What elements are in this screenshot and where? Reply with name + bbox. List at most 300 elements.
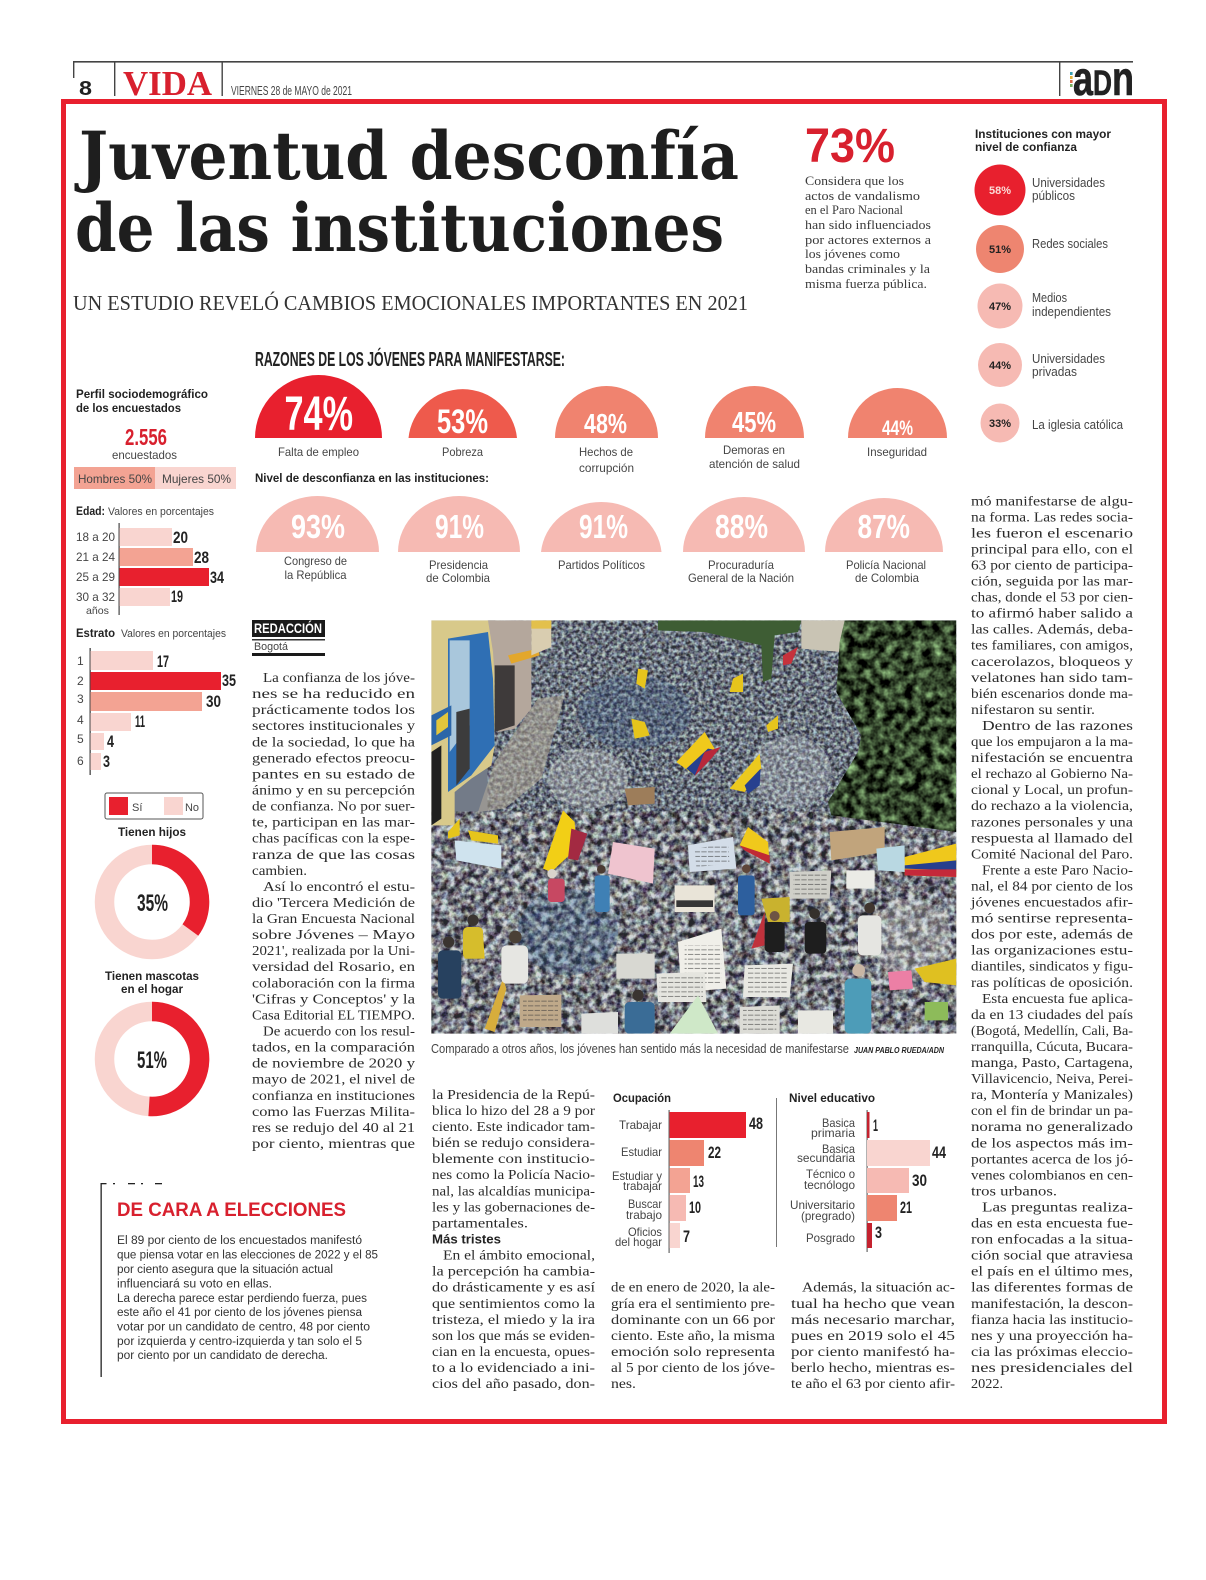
article text: column 1: res se redujo del 40 al 21 <box>252 1121 415 1136</box>
donut chart: tienen hijos <box>104 825 200 950</box>
circle: universidades públicas: 58% <box>989 185 1011 197</box>
article text: column 1: Casa Editorial EL TIEMPO. <box>252 1008 415 1023</box>
bar chart: estrato: 3 <box>103 752 110 771</box>
circle: universidades públicas: públicos <box>1032 189 1075 203</box>
article text: column 1: ánimo y en su percepción <box>252 784 415 798</box>
article text: column 1: de noviembre de 2020 y <box>252 1057 415 1072</box>
bar chart: ocupación: Trabajar <box>619 1118 662 1132</box>
bar chart: nivel educativo: 44 <box>932 1143 946 1162</box>
article text: column 5: Las preguntas realiza- <box>982 1200 1133 1216</box>
article text: column 5: el país en el último mes, <box>971 1265 1133 1280</box>
article text: column 1: confianza en instituciones <box>252 1089 415 1104</box>
red page frame <box>64 102 1164 1422</box>
callout: 73%: en el Paro Nacional <box>805 202 903 217</box>
semicircle: pobreza: Pobreza <box>442 445 483 459</box>
bar chart: nivel educativo: Universitario <box>790 1198 855 1212</box>
article text: column 1: la Gran Encuesta Nacional <box>252 912 415 927</box>
semicircle: policía <box>825 498 943 585</box>
circle: iglesia católica: 33% <box>989 418 1011 430</box>
article text: column 5: ción, seguida por las mar- <box>971 574 1133 590</box>
bar chart: estrato: 1 <box>77 654 84 668</box>
gender split: Hombres 50% <box>78 472 152 486</box>
gender split: Mujeres 50% <box>162 472 231 486</box>
semicircle: hechos de corrupción: Hechos de <box>579 445 633 459</box>
article text: column 5: de los aspectos más im- <box>971 1136 1133 1151</box>
article text: column 2: tristeza, el miedo y la ira <box>432 1313 596 1328</box>
semicircle: policía: 87% <box>858 508 910 545</box>
semicircle: hechos de corrupción <box>555 386 658 475</box>
article text: column 5: ción social que atraviesa <box>971 1249 1134 1264</box>
panel: perfil sociodemográfico <box>74 387 236 1106</box>
legend sí/no: No <box>185 802 199 814</box>
subtitle: UN ESTUDIO REVELÓ CAMBIOS EMOCIONALES IMPORTANTES EN 2021 <box>73 291 748 315</box>
article text: column 5: to afirmó haber salido a <box>971 607 1134 622</box>
article text: column 5: na forma. Las redes socia- <box>971 510 1133 525</box>
date: VIERNES 28 de MAYO de 2021 <box>231 84 352 98</box>
article text: column 4: por ciento manifestó ha- <box>791 1345 955 1360</box>
semicircle: policía: Policía Nacional <box>846 558 926 572</box>
semicircle: partidos políticos <box>541 502 662 572</box>
bar chart: nivel educativo: Posgrado <box>806 1231 855 1245</box>
box text: que piensa votar en las elecciones de 2022 y el 85 <box>117 1250 378 1262</box>
photo: protest march <box>431 620 956 1034</box>
article text: column 3: dominante con un 66 por <box>611 1313 775 1328</box>
donut chart: tienen mascotas: en el hogar <box>121 982 183 996</box>
circle: medios independientes: Medios <box>1032 291 1067 305</box>
semicircle: congreso <box>256 496 379 582</box>
article text: column 5: ras políticas de oposición. <box>971 976 1133 991</box>
article text: column 1: Así lo encontró el estu- <box>263 880 415 895</box>
section name: VIDA <box>123 64 213 103</box>
circle: universidades públicas: Universidades <box>1032 176 1105 190</box>
article text: column 5: con el fin de brindar un pa- <box>971 1104 1133 1119</box>
semicircle: inseguridad: 44% <box>882 417 913 440</box>
donut chart: tienen hijos: 35% <box>137 890 168 917</box>
panel heading: Instituciones con mayor <box>975 129 1112 141</box>
article text: column 1: colaboración con la firma <box>252 976 416 991</box>
article text: column 5: mó sentirse representa- <box>971 912 1133 927</box>
article text: column 5: do rechazo a la violencia, <box>971 799 1133 814</box>
article text: column 5: portantes acerca de los jó- <box>971 1152 1133 1167</box>
callout: 73%: 73% <box>805 120 895 173</box>
article text: column 1: chas pacíficas con la espe- <box>252 832 415 847</box>
bar chart: estrato: 4 <box>77 713 84 727</box>
article text: column 5: Villavicencio, Neiva, Perei- <box>971 1072 1133 1087</box>
photo caption: Comparado a otros años, los jóvenes han sentido más la necesidad de manifestarse <box>431 1042 849 1056</box>
bar chart: nivel educativo: Basica <box>822 1142 855 1156</box>
circle: universidades públicas <box>974 164 1105 216</box>
bar chart: edad: 19 <box>171 587 183 606</box>
article text: column 5: 2022. <box>971 1377 1003 1392</box>
gender split <box>74 467 236 489</box>
article text: column 1: pantes en su estado de <box>252 767 415 782</box>
profile heading: de los encuestados <box>76 401 181 415</box>
semicircle: pobreza: 53% <box>437 403 488 441</box>
semicircle: partidos políticos: Partidos Políticos <box>558 558 645 572</box>
box heading: DE CARA A ELECCIONES <box>117 1200 346 1221</box>
people <box>463 927 483 959</box>
circle: redes sociales <box>976 225 1108 273</box>
article text: column 1 <box>252 671 416 1152</box>
bar chart: ocupación: trabajo <box>626 1208 662 1222</box>
flags <box>676 732 715 775</box>
article text: column 5: nes presidenciales del <box>971 1361 1133 1376</box>
article text: column 5: respuesta al llamado del <box>971 831 1133 846</box>
article text: column 5: mó manifestarse de algu- <box>971 494 1133 509</box>
bar chart: estrato: 11 <box>135 712 145 731</box>
article text: column 5: cacerolazos, bloqueos y <box>971 655 1133 670</box>
semicircle: inseguridad <box>848 388 947 459</box>
semicircle: presidencia <box>398 496 520 585</box>
donut chart: tienen mascotas <box>104 969 200 1106</box>
article text: column 1: tados, en la comparación <box>252 1041 415 1056</box>
bar chart: ocupación: 13 <box>693 1172 704 1191</box>
circle: redes sociales: Redes sociales <box>1032 237 1108 251</box>
bar chart: estrato: 30 <box>206 692 221 711</box>
article text: column 3 <box>611 1281 776 1392</box>
article text: column 2: cios del año pasado, don- <box>432 1377 595 1392</box>
article text: column 2: ciento. Este indicador tam- <box>432 1120 595 1135</box>
total encuestados: 2.556 <box>125 424 167 450</box>
box text: este año el 41 por ciento de los jóvenes piensa <box>117 1307 363 1319</box>
title: Juventud desconfía <box>74 117 739 195</box>
bar chart: ocupación: Estudiar y <box>612 1169 662 1183</box>
bar chart: edad: 30 a 32 <box>76 590 115 604</box>
box text: votar por un candidato de centro, 48 por ciento <box>117 1322 370 1334</box>
article text: column 5: que los empujaron a la ma- <box>971 735 1133 750</box>
article text: column 1: te, participan en las mar- <box>252 816 415 831</box>
article text: column 4: Además, la situación ac- <box>802 1281 955 1296</box>
semicircle: falta de empleo <box>255 375 382 459</box>
article text: column 5: nifestación se encuentra <box>971 751 1134 766</box>
total encuestados: encuestados <box>112 448 177 462</box>
bar chart: edad: 20 <box>173 528 188 547</box>
bar chart: ocupación <box>612 1091 763 1253</box>
article text: column 5: velatones han sido tam- <box>971 671 1133 686</box>
article text: column 5: las organizaciones estu- <box>971 944 1133 959</box>
article text: column 1: como las Fuerzas Milita- <box>252 1105 415 1120</box>
bar chart: estrato: 5 <box>77 732 84 746</box>
byline: Bogotá <box>254 641 289 653</box>
bar chart: estrato: 6 <box>77 754 84 768</box>
article text: column 1: dio 'Tercera Medición de <box>252 896 415 911</box>
article text: column 1: generado efectos preocu- <box>252 751 415 766</box>
article text: column 2: que sentimientos como la <box>432 1297 596 1312</box>
article text: column 5: razones personales y una <box>971 815 1134 830</box>
box text: influenciará su voto en ellas. <box>117 1278 272 1290</box>
article text: column 5: nes y una proyección ha- <box>971 1329 1133 1344</box>
bar chart: edad: años <box>86 605 109 617</box>
panel heading: nivel de confianza <box>975 142 1078 154</box>
article text: column 2: cian en la encuesta, opues- <box>432 1345 595 1360</box>
callout: 73%: han sido influenciados <box>805 217 931 232</box>
building left <box>431 620 495 825</box>
article text: column 5: ra, Montería y Manizales) <box>971 1088 1133 1103</box>
article text: column 5: Comité Nacional del Paro. <box>971 847 1133 862</box>
crowd tonal patches <box>548 749 628 809</box>
article text: column 5: tros urbanos. <box>971 1184 1057 1199</box>
bar chart: edad: 21 a 24 <box>76 550 115 564</box>
bar chart: estrato: Estrato <box>76 626 115 640</box>
page header <box>73 53 1134 106</box>
semicircle: presidencia: Presidencia <box>429 558 488 572</box>
box text: La derecha parece estar perdiendo fuerza, pues <box>117 1293 367 1305</box>
circle: universidades privadas: privadas <box>1032 365 1077 379</box>
semicircle: hechos de corrupción: 48% <box>584 408 627 439</box>
byline <box>252 619 325 656</box>
bar chart: nivel educativo: tecnólogo <box>804 1178 855 1192</box>
semicircle: falta de empleo: Falta de empleo <box>278 445 359 459</box>
bar chart: edad <box>76 504 224 617</box>
semicircle: demoras en salud <box>705 386 804 471</box>
callout: 73%: bandas criminales y la <box>805 261 930 276</box>
article text: column 1: 2021', realizada por la Uni- <box>252 944 415 959</box>
article text: column 2: son los que más se eviden- <box>432 1329 595 1344</box>
article text: column 5: Dentro de las razones <box>982 719 1133 734</box>
bar chart: ocupación: 7 <box>683 1227 690 1246</box>
callout: 73%: por actores externos a <box>805 232 931 247</box>
article text: column 4: te año el 63 por ciento afir- <box>791 1377 955 1392</box>
divider line between charts <box>776 1098 777 1247</box>
box text: por ciento por un candidato de derecha. <box>117 1350 328 1362</box>
article text: column 5: el rechazo al Gobierno Na- <box>971 767 1133 782</box>
bar chart: nivel educativo: 1 <box>873 1116 878 1135</box>
article text: column 5: manga, Pasto, Cartagena, <box>971 1056 1133 1071</box>
title <box>74 117 739 267</box>
article text: column 5: das en esta encuesta fue- <box>971 1216 1133 1232</box>
circle: medios independientes: independientes <box>1032 305 1111 319</box>
semicircle: procuraduría: Procuraduría <box>708 558 774 572</box>
profile heading: Perfil sociodemográfico <box>76 387 208 401</box>
circle: universidades privadas <box>978 343 1105 387</box>
box text <box>117 1235 378 1362</box>
panel: nivel de desconfianza <box>255 471 943 585</box>
bar chart: ocupación: 10 <box>689 1198 701 1217</box>
semicircle: procuraduría: 88% <box>715 508 768 545</box>
bar chart: edad: 18 a 20 <box>76 530 115 544</box>
bar chart: nivel educativo: Basica <box>822 1116 855 1130</box>
article text: column 1: mayo de 2021, el nivel de <box>252 1073 415 1088</box>
semicircle: congreso: Congreso de <box>284 554 347 568</box>
legend sí/no <box>105 793 203 819</box>
page number: 8 <box>79 78 92 100</box>
bar chart: nivel educativo: Técnico o <box>806 1167 855 1181</box>
bar chart: estrato: 17 <box>157 652 169 671</box>
article text: column 2: nal, las alcaldías municipa- <box>432 1184 595 1199</box>
byline: REDACCIÓN <box>254 619 322 636</box>
bar chart: ocupación: 48 <box>749 1114 763 1133</box>
article text: column 2: nes como la Policía Nacio- <box>432 1168 595 1183</box>
total encuestados <box>112 424 177 462</box>
article text: column 5: bién escenarios donde ma- <box>971 687 1133 702</box>
article text: column 4: berlo hecho, mientras es- <box>791 1361 955 1376</box>
article text: column 1: versidad del Rosario, en <box>252 960 415 975</box>
box text: por izquierda y centro-izquierda y tan solo el 5 <box>117 1336 362 1348</box>
article text: column 1: nes se ha reducido en <box>252 687 415 702</box>
article text: column 5: las calles. Además, deba- <box>971 623 1133 638</box>
bar chart: nivel educativo: (pregrado) <box>801 1209 855 1223</box>
semicircle: inseguridad: Inseguridad <box>867 445 927 459</box>
bar chart: ocupación: del hogar <box>615 1235 662 1249</box>
box text: por ciento asegura que la situación actual <box>117 1264 333 1276</box>
article text: column 2: to a lo evidenciado a ini- <box>432 1361 595 1376</box>
bar chart: edad: Edad: <box>76 504 105 518</box>
callout: 73%: actos de vandalismo <box>805 188 920 203</box>
article text: column 1: La confianza de los jóve- <box>263 671 415 686</box>
semicircle: congreso: la República <box>284 568 347 582</box>
semicircle: procuraduría: General de la Nación <box>688 571 794 585</box>
article text: column 5: fianza hacia las institucio- <box>971 1313 1133 1328</box>
bar chart: ocupación: 22 <box>708 1143 721 1162</box>
donut chart: tienen mascotas: Tienen mascotas <box>105 969 199 983</box>
article text: column 1: de confianza. No por suer- <box>252 800 415 815</box>
article text: column 5: tes familiares, con amigos, <box>971 639 1133 654</box>
article text: column 5: da en 13 ciudades del país <box>971 1008 1133 1023</box>
article text: column 5: rranquilla, Cúcuta, Bucara- <box>971 1040 1133 1055</box>
article text: column 5: nal, el 84 por ciento de los <box>971 880 1133 894</box>
circle: iglesia católica: La iglesia católica <box>1032 418 1123 432</box>
article text: column 4: tual ha hecho que vean <box>791 1297 955 1312</box>
semicircle: demoras en salud: 45% <box>732 407 776 439</box>
article text: column 5: 63 por ciento de participa- <box>971 558 1133 574</box>
bar chart: nivel educativo: primaria <box>811 1126 855 1140</box>
article text: column 4 <box>791 1281 955 1392</box>
article text: column 2: les y las gobernaciones de- <box>432 1200 595 1215</box>
semicircle: demoras en salud: Demoras en <box>723 443 785 457</box>
tree right <box>825 620 956 834</box>
article text: column 5: ron enfocadas a la situa- <box>971 1233 1133 1248</box>
article text: column 1: sectores institucionales y <box>252 719 415 734</box>
callout: 73% <box>805 120 931 291</box>
bar chart: ocupación: trabajar <box>623 1179 662 1193</box>
profile heading <box>76 387 208 415</box>
article text: column 5: dos por este, además de <box>971 928 1133 943</box>
article text: column 1: por ciento, mientras que <box>252 1137 415 1152</box>
article text: column 1: ranza de que las cosas <box>252 848 415 863</box>
panel: de cara a elecciones <box>100 1183 378 1377</box>
circle: iglesia católica <box>980 404 1123 442</box>
article text: column 3: al 5 por ciento de los jóve- <box>611 1361 775 1376</box>
heading: razones: RAZONES DE LOS JÓVENES PARA MANIFESTARSE: <box>255 347 565 371</box>
logo adn: aDn <box>1073 53 1134 106</box>
article text: column 5: diantiles, sindicatos y figu- <box>971 960 1133 975</box>
article text: column 3: gría era el sentimiento pre- <box>611 1297 775 1312</box>
article text: column 2: blemente con institucio- <box>432 1152 595 1167</box>
circle: redes sociales: 51% <box>989 244 1011 256</box>
article text: column 5: chas, donde el 53 por cien- <box>971 591 1133 606</box>
article text: column 2: la Presidencia de la Repú- <box>432 1088 595 1103</box>
semicircle: partidos políticos: 91% <box>579 508 628 545</box>
bar chart: estrato: 3 <box>77 692 84 706</box>
article text: column 3: emoción solo representa <box>611 1345 776 1360</box>
article text: column 2: partamentales. <box>432 1216 528 1231</box>
semicircle: procuraduría <box>683 497 805 585</box>
article text: column 1: De acuerdo con los resul- <box>263 1024 415 1040</box>
bar chart: estrato: Valores en porcentajes <box>121 628 226 640</box>
article text: column 2: bién se redujo considera- <box>432 1136 595 1151</box>
semicircle: demoras en salud: atención de salud <box>709 457 800 471</box>
bar chart: ocupación: Buscar <box>628 1197 662 1211</box>
sidewalk <box>478 695 565 812</box>
article text: column 5: jóvenes encuestados afir- <box>970 896 1133 910</box>
bar chart: edad: 28 <box>194 548 209 567</box>
article text: column 1: prácticamente todos los <box>252 703 415 718</box>
semicircle: presidencia: 91% <box>435 508 484 545</box>
bar chart: nivel educativo: Nivel educativo <box>789 1091 875 1105</box>
semicircle: hechos de corrupción: corrupción <box>579 461 634 475</box>
article text: column 4: pues en 2019 solo el 45 <box>791 1329 955 1344</box>
bar chart: nivel educativo: 30 <box>912 1171 927 1190</box>
callout: 73%: Considera que los <box>805 173 904 188</box>
article text: column 2: do drásticamente y es así <box>432 1281 595 1296</box>
article text: column 5: cia las próximas eleccio- <box>971 1345 1133 1360</box>
bar chart: ocupación: Estudiar <box>621 1145 662 1159</box>
bar chart: ocupación: Oficios <box>628 1225 662 1239</box>
article text: column 5: (Bogotá, Medellín, Cali, Ba- <box>971 1024 1133 1039</box>
legend sí/no: Sí <box>132 802 142 814</box>
semicircle: presidencia: de Colombia <box>426 571 490 585</box>
tree top <box>658 620 801 682</box>
article text: column 3: de en enero de 2020, la ale- <box>611 1281 775 1296</box>
donut chart: tienen hijos: Tienen hijos <box>118 825 186 839</box>
article text: column 5: norama no generalizado <box>971 1120 1133 1135</box>
title: de las instituciones <box>75 189 724 267</box>
semicircle: congreso: 93% <box>291 508 345 545</box>
panel: razones de los jóvenes <box>255 347 947 475</box>
article text: column 5: manifestación, la descon- <box>971 1297 1133 1312</box>
article text: column 1: cambien. <box>252 864 307 879</box>
circle: universidades privadas: Universidades <box>1032 352 1105 366</box>
donut chart: tienen mascotas: 51% <box>137 1047 167 1074</box>
article text: column 5 <box>970 494 1134 1392</box>
heading: desconfianza: Nivel de desconfianza en las instituciones: <box>255 471 489 485</box>
bar chart: edad: Valores en porcentajes <box>108 506 214 518</box>
article text: column 5: venes colombianos en cen- <box>971 1168 1133 1183</box>
bar chart: edad: 34 <box>210 568 224 587</box>
article text: column 3: nes. <box>611 1377 636 1392</box>
semicircle: falta de empleo: 74% <box>284 388 353 441</box>
bar chart: estrato: 2 <box>77 674 84 688</box>
callout: 73%: misma fuerza pública. <box>805 276 927 291</box>
article text: column 3: ciento. Este año, la misma <box>611 1329 776 1344</box>
callout: 73%: los jóvenes como <box>805 246 900 261</box>
signs <box>608 842 655 884</box>
bar chart: edad: 25 a 29 <box>76 570 115 584</box>
bar chart: nivel educativo: secundaria <box>797 1151 855 1165</box>
bar chart: nivel educativo <box>789 1091 946 1252</box>
bar chart: nivel educativo: 21 <box>900 1198 912 1217</box>
article text: column 5: principal para ello, con el <box>971 542 1133 557</box>
article text: column 5: Esta encuesta fue aplica- <box>982 992 1133 1007</box>
article text: column 1: 'Cifras y Conceptos' y la <box>252 992 416 1007</box>
article text: column 2: blica lo hizo del 28 a 9 por <box>432 1104 595 1119</box>
photo caption: JUAN PABLO RUEDA/ADN <box>854 1046 944 1055</box>
article text: column 2: la percepción ha cambia- <box>432 1265 595 1280</box>
article text: column 5: Frente a este Paro Nacio- <box>982 863 1133 878</box>
semicircle: pobreza <box>408 389 517 459</box>
article text: column 2: En el ámbito emocional, <box>443 1249 595 1264</box>
panel: instituciones con mayor confianza <box>974 129 1123 442</box>
article text: column 2: Más tristes <box>432 1232 501 1246</box>
bar chart: estrato: 4 <box>107 732 114 751</box>
circle: universidades privadas: 44% <box>989 360 1011 372</box>
article text: column 5: las diferentes formas de <box>971 1281 1133 1296</box>
article text: column 1: de la sociedad, lo que ha <box>252 735 416 750</box>
semicircle: policía: de Colombia <box>855 571 919 585</box>
article text: column 4: más necesario marchar, <box>791 1313 955 1328</box>
box text: El 89 por ciento de los encuestados manifestó <box>117 1235 362 1247</box>
article text: column 2 <box>432 1088 596 1392</box>
